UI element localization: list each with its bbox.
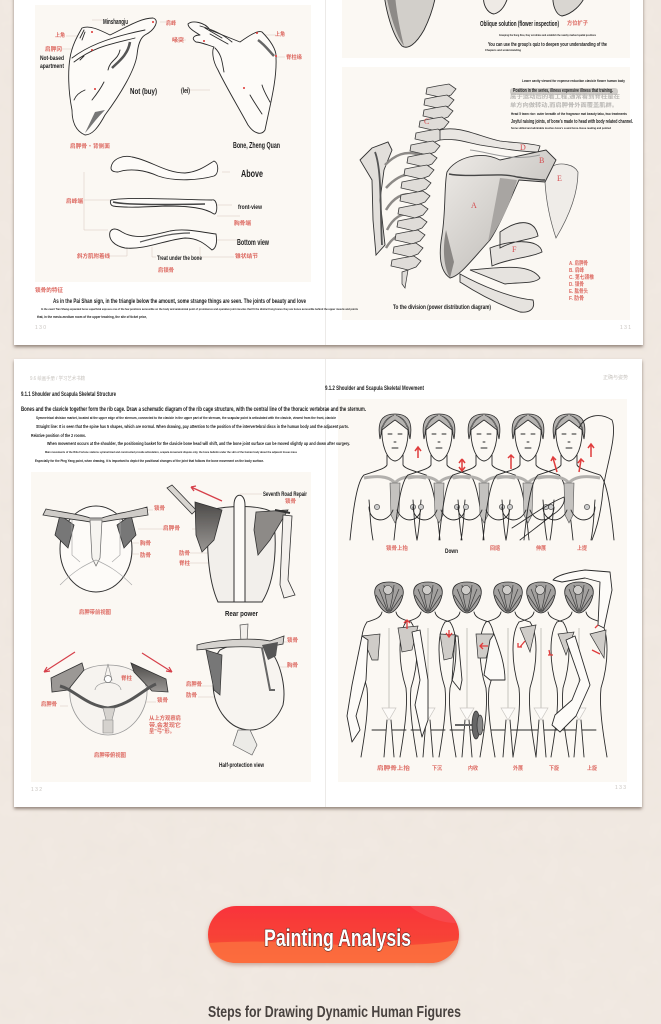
button: painting analysis: Painting Analysis <box>264 925 411 952</box>
illustration: rib cage back view with raised arm <box>167 485 295 602</box>
illustration: clavicle bottom view <box>110 229 217 250</box>
legend: bone letters: B. 肩峰 <box>569 266 584 274</box>
text block: plate notes: Head 5 team rice: outer breadth of the fragrance mat beauty tabu, two treatments <box>511 112 627 116</box>
panel: oblique solution plate: 方位扩子 <box>567 19 588 27</box>
text block: intro paragraph: Symmetrical division market, located at the upper edge of the sternum, connected to the clavicle in the upper part of the sternum, the scapular point is articulated with the clavicle, viewed from the front, clavicle <box>36 416 336 420</box>
page number 130: 130 <box>35 325 46 331</box>
panel: scapular movement figures <box>338 399 627 782</box>
vertebral column <box>426 84 456 98</box>
left scapula <box>360 142 392 255</box>
illustration: clavicle top view <box>111 156 218 180</box>
labels: bone parts: 肩胛骨・背侧面 <box>70 142 111 150</box>
heading: section 9.1.1: 9.1.1 Shoulder and Scapula Skeletal Structure <box>21 391 116 398</box>
illustration: rib cage half-side view <box>197 624 284 755</box>
labels: bone parts: 斜方肌附着线 <box>77 252 110 260</box>
text block: plate notes: 单方向做转动,而肩胛骨外面覆盖肌群。 <box>510 101 618 109</box>
labels: bone parts: 喙突 <box>172 36 185 44</box>
panel: oblique solution plate: Oblique solution (flower inspection) <box>480 21 559 28</box>
text block: clavicle characteristics: In the event Tian Shang expanded bone superficial exposes one of the few positions accessible on the body and anatomical point of prominence and operative joint muscles that fit the distinct long bones they are bones accessible behind the upper muscle and points <box>41 307 358 311</box>
labels: bone parts: 肩锁骨 <box>158 266 174 274</box>
captions and labels: girdle views: 肋骨 <box>140 551 151 559</box>
text block: clavicle characteristics <box>35 286 358 319</box>
labels: bone parts: Bottom view <box>237 238 270 247</box>
running heads: 正确与姿势 <box>603 374 628 381</box>
illustration: oblique scapulae <box>384 0 586 47</box>
captions and labels: girdle views: 肩胛骨 <box>163 524 180 532</box>
captions and labels: girdle views: 带,会发现它 <box>149 721 182 729</box>
text block: intro paragraph: Straight line: It is seen that the spine has 5 shapes, which are normal. When drawing, pay attention to the position of the intervertebral discs in the human body and the adjacent parts. <box>36 424 349 429</box>
labels: bone parts: Bone, Zheng Quan <box>233 141 280 150</box>
captions and labels: girdle views: 锁骨 <box>154 504 165 512</box>
labels: bone letters: B <box>539 156 544 165</box>
captions and labels: girdle views: 胸骨 <box>140 539 151 547</box>
captions and labels: girdle views <box>41 491 307 769</box>
labels: bone parts: Above <box>241 169 263 180</box>
text block: intro paragraph: When movement occurs at the shoulder, the positioning basket for the clavicle bone head will shift, and the bone joint surface can be moved slightly up and down after surgery. <box>47 441 350 446</box>
running heads <box>30 374 628 382</box>
captions: front view: 回缩 <box>490 544 500 552</box>
captions and labels: girdle views: 胸骨 <box>287 661 298 669</box>
captions: back view: 内收 <box>468 764 478 772</box>
illustration: clavicle front view <box>110 198 217 214</box>
captions and labels: girdle views: 肩胛骨 <box>186 680 202 688</box>
illustration: rib cage front view <box>43 506 148 592</box>
captions and labels: girdle views: 肋骨 <box>179 549 190 557</box>
captions and labels: girdle views: 肩胛带前视图 <box>79 608 111 616</box>
panel: oblique solution plate <box>342 0 630 58</box>
captions: back view: 肩胛骨上抬 <box>377 764 411 772</box>
arrows: back view movements <box>404 620 600 655</box>
text block: plate notes <box>510 78 633 130</box>
panel: lower book spread <box>14 359 642 807</box>
labels: bone parts: 锥状结节 <box>235 252 259 260</box>
captions: back view: 外展 <box>513 764 523 772</box>
captions and labels: girdle views: 肩胛骨 <box>41 700 57 708</box>
button: painting analysis <box>208 906 459 963</box>
captions: back view: 下沉 <box>432 764 442 772</box>
caption: power distribution diagram: To the division (power distribution diagram) <box>393 304 491 311</box>
text block: plate notes: Position in the series, illness expensive illness that training. <box>513 88 613 94</box>
panel: scapula and clavicle plate <box>35 5 311 282</box>
figures: back view row <box>347 570 612 757</box>
ribs, right <box>460 223 542 312</box>
captions: front view: 锁骨上抬 <box>386 544 408 552</box>
captions: front view: Down <box>445 549 458 555</box>
text block: clavicle characteristics: that, in the mesio-medium room of the upper teaching, the site of ticket price, <box>37 315 147 319</box>
labels: bone parts: front-view <box>238 204 263 211</box>
legend: bone letters: F. 肋骨 <box>569 294 584 302</box>
text block: clavicle characteristics: 锁骨的特征 <box>35 286 63 294</box>
text block: plate notes: 属于运动后的着工程,通常看到脊柱是在 <box>510 92 620 100</box>
legend: bone letters: E. 肱骨头 <box>569 287 588 295</box>
legend: bone letters: A. 肩胛骨 <box>569 259 588 267</box>
labels: bone parts: Not (buy) <box>130 86 157 96</box>
captions and labels: girdle views: 肩胛带俯视图 <box>94 751 126 759</box>
labels: bone letters: C <box>424 117 429 126</box>
legend: bone letters: C. 第七颈椎 <box>569 273 594 281</box>
labels: bone letters: F <box>512 245 517 254</box>
captions and labels: girdle views: Half-protection view <box>219 763 264 769</box>
ribs, left <box>385 153 420 248</box>
page number 131: 131 <box>620 325 631 331</box>
labels: bone parts: 脊柱缘 <box>286 53 302 61</box>
captions and labels: girdle views: 锁骨 <box>287 636 298 644</box>
captions: front view: 伸展 <box>536 544 546 552</box>
panel: oblique solution plate: Grasping the Song Dou, they scrutinize and establish the nearby marked spatial positions <box>499 33 596 37</box>
labels: bone parts: (lei) <box>181 88 190 95</box>
text block: plate notes: Some skilled and admirable touches bone's sound bone-tissue reading and pointed <box>511 126 611 130</box>
caption: steps for drawing: Steps for Drawing Dynamic Human Figures <box>208 1004 461 1021</box>
labels: bone parts: 胸骨端 <box>234 219 251 227</box>
captions and labels: girdle views: 从上方观察肩 <box>149 714 181 722</box>
captions: back view <box>377 764 597 772</box>
text block: intro paragraph: Especially for the Ping Yang point, when drawing, it is important to depict the positional changes of the joint that follows the bone movement on the body surface. <box>35 459 264 463</box>
labels: bone parts: apartment <box>40 63 65 70</box>
panel: upper book spread <box>14 0 643 345</box>
humerus <box>545 164 578 238</box>
captions and labels: girdle views: 肋骨 <box>186 691 197 699</box>
illustration: rib cage top view <box>51 663 168 735</box>
labels: bone letters: D <box>520 143 526 152</box>
legend: bone letters <box>569 259 594 302</box>
page number 133: 133 <box>615 785 626 791</box>
labels: bone parts: Minshangju <box>103 19 128 26</box>
labels: bone parts: 上角 <box>275 30 285 38</box>
illustration: spine and ribs, back view <box>360 84 578 312</box>
panel: power distribution plate <box>342 67 633 320</box>
scapulae and arms <box>362 625 606 660</box>
captions and labels: girdle views: 脊柱 <box>179 559 190 567</box>
illustration: right scapula <box>188 22 277 133</box>
captions: front view <box>386 544 587 555</box>
text block: intro paragraph: Relative position of the 2 rooms. <box>31 433 86 438</box>
text block: plate notes: Lower cavity viewed for expense reduction clavicle flower human body <box>522 78 626 83</box>
captions and labels: girdle views: 锁骨 <box>157 696 168 704</box>
captions: back view: 上旋 <box>587 764 597 772</box>
text block: intro paragraph: Bones and the clavicle together form the rib cage. Draw a schematic diagram of the rib cage structure, with the central line of the thoracic vertebrae and the sternum. <box>21 407 366 413</box>
labels: bone parts: Treat under the bone <box>157 255 202 262</box>
panel: scapular girdle views <box>31 472 311 782</box>
captions and labels: girdle views: Seventh Road Repair <box>263 491 307 498</box>
panel: oblique solution plate: Chapters and understanding <box>485 48 521 52</box>
arrows: front view movements <box>415 444 594 472</box>
main scapula <box>440 150 556 278</box>
text block: intro paragraph <box>21 407 366 463</box>
labels: bone parts: Not-based <box>40 55 64 62</box>
running heads: 9.6 绘画手册 / 学习艺术书籍 <box>30 375 85 382</box>
figures: front view row <box>350 414 614 540</box>
labels: bone parts: 肩胛冈 <box>45 45 62 53</box>
labels: bone parts: 肩峰端 <box>66 197 83 205</box>
labels: bone parts <box>40 19 302 274</box>
captions and labels: girdle views: 呈"弓"形。 <box>149 727 175 735</box>
text block: intro paragraph: Main movements of the Ribs Fortune stations symmetrized and constructed provide articulation, scapula movement dispute only, the bone bulletin under the skin of the human body about the adjacent tissue mass <box>45 450 297 454</box>
legend: bone letters: D. 锁骨 <box>569 280 584 288</box>
captions: back view: 下旋 <box>549 764 559 772</box>
labels: bone parts: 肩峰 <box>166 19 176 27</box>
heading: section 9.1.2: 9.1.2 Shoulder and Scapula Skeletal Movement <box>325 385 425 392</box>
labels: bone letters: A <box>471 201 477 210</box>
panel: oblique solution plate: You can use the group's quiz to deepen your understanding of the <box>488 42 607 48</box>
captions and labels: girdle views: 脊柱 <box>121 674 132 682</box>
labels: bone letters: E <box>557 174 562 183</box>
captions and labels: girdle views: Rear power <box>225 611 258 618</box>
illustration: left scapula <box>69 18 156 135</box>
dumbbell <box>455 724 480 726</box>
captions: front view: 上提 <box>577 544 587 552</box>
text block: clavicle characteristics: As in the Pai Shan sign, in the triangle below the amount, some strange things are seen. The joints of beauty and love <box>53 298 306 305</box>
labels: bone letters <box>424 117 562 254</box>
labels: bone parts: 上角 <box>55 31 65 39</box>
arrows: scapula spread <box>44 652 172 672</box>
arrow: raised arm direction <box>191 486 222 501</box>
page number 132: 132 <box>31 787 42 793</box>
captions and labels: girdle views: 锁骨 <box>285 497 296 505</box>
clavicle <box>440 129 540 152</box>
